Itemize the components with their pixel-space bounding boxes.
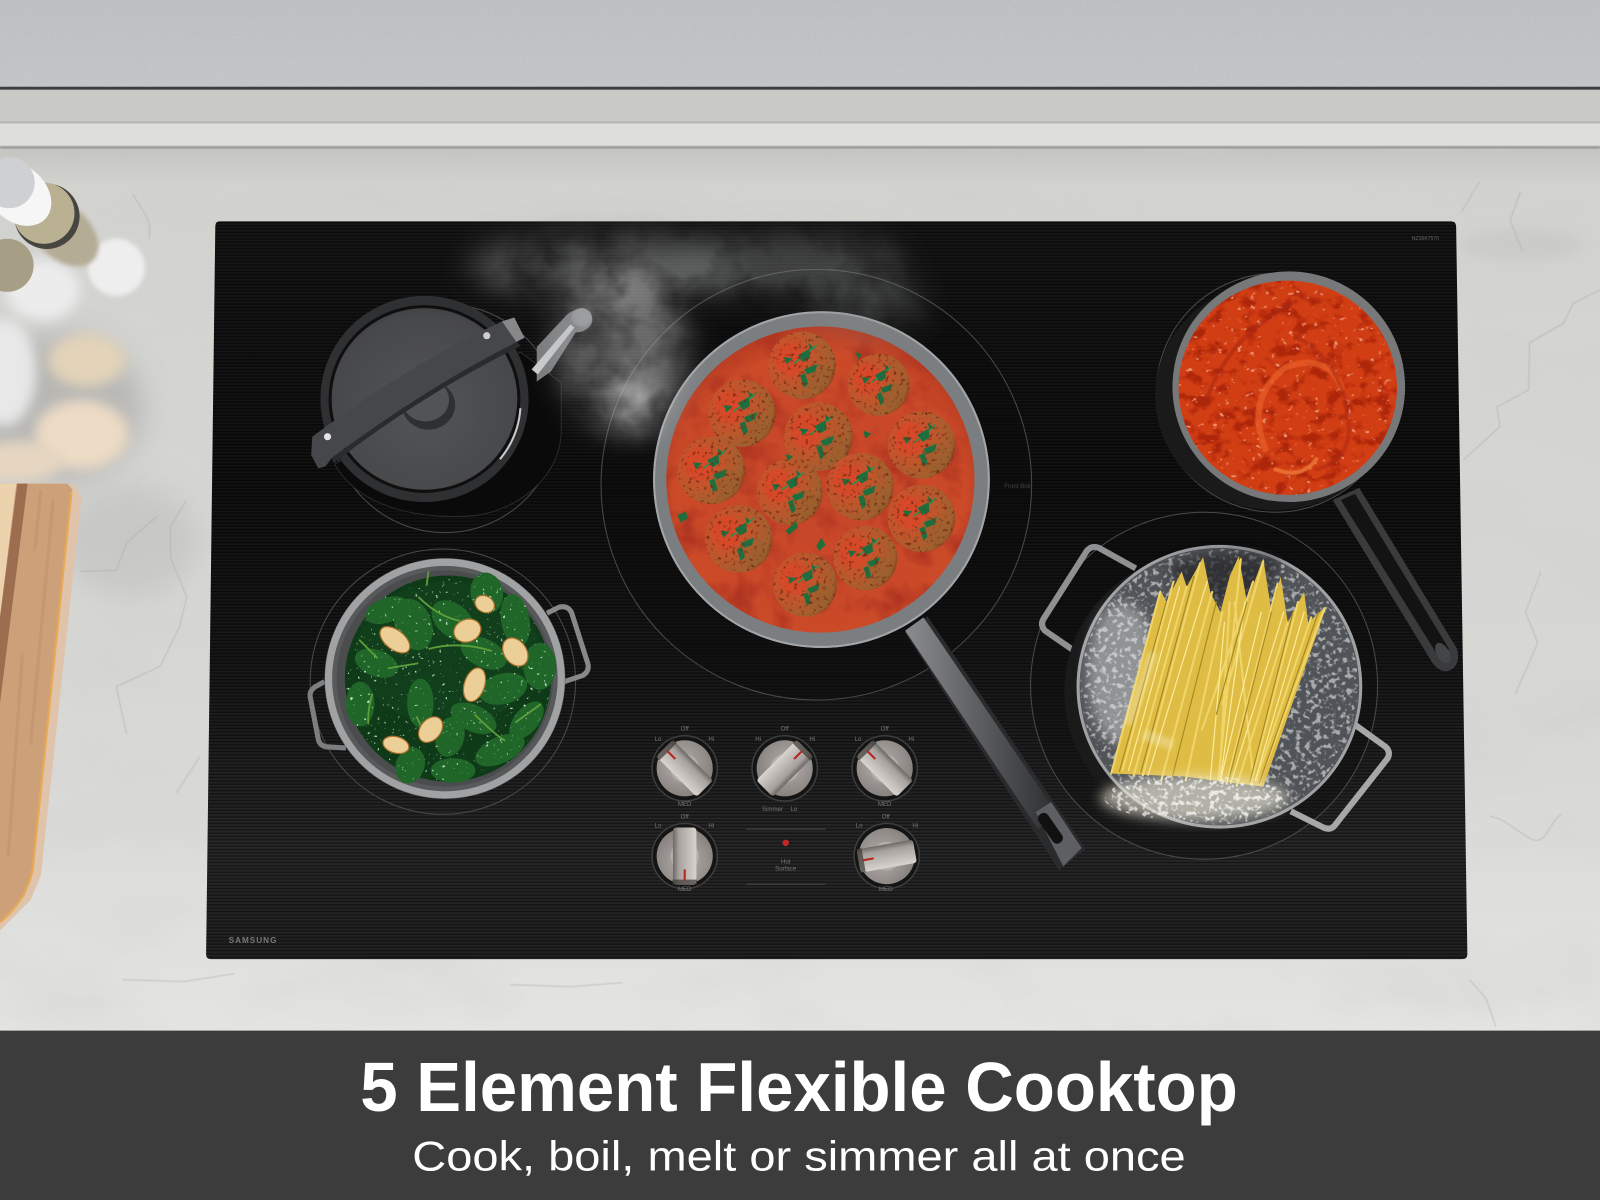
burner rings [310,269,1395,859]
knob labels: MED [678,801,692,808]
hot surface indicator [746,829,826,885]
knob labels: MED [678,886,692,893]
knob labels: MED [879,886,893,893]
knob labels [655,726,918,893]
subtitle: Cook, boil, melt or simmer all at once [412,1132,1186,1179]
pasta pot [1042,545,1389,832]
knob labels: Lo [856,823,863,830]
marble countertop [0,149,1600,1033]
knob labels: Off [882,813,890,820]
knob labels: Hi [908,736,914,743]
knob labels: Lo [855,736,862,743]
spinach pot [310,558,588,799]
saucepan handle [1333,488,1458,671]
title: 5 Element Flexible Cooktop [360,1048,1238,1126]
pan handle [905,616,1086,870]
tomato sauce pan [1155,271,1458,671]
knob labels: Off [681,813,689,820]
loose parsley [678,352,871,551]
knob labels: Hi [755,736,761,743]
left blurred reflections [0,239,145,482]
cutting board [0,484,82,931]
cooktop small labels [229,236,1439,945]
cooktop glass panel [206,221,1467,959]
knob labels: Lo [790,806,798,813]
knob labels: MED [878,801,892,808]
knob labels: Off [881,726,889,733]
bottom foam [1100,776,1288,820]
hot surface indicator: Surface [775,865,797,872]
knob labels: Hi [708,736,714,743]
pot handles [1042,547,1389,829]
knob labels: Hi [708,823,714,830]
spice bottles [0,149,111,292]
caption band [0,1031,1600,1200]
knob labels: Lo [655,736,662,743]
kettle [311,296,592,517]
cooktop small labels: Front Boil [1004,483,1030,490]
backsplash wall [0,0,1600,88]
spinach [345,570,556,787]
garlic [375,592,533,756]
cooktop small labels: NZ36K7570 [1412,236,1439,242]
countertop ledge [0,87,1600,149]
centre frying pan with meatballs [653,311,1086,870]
knob labels: Hi [809,736,815,743]
meatballs [678,332,955,617]
knob labels: Lo [655,823,662,830]
steam [469,233,923,429]
pasta [1111,556,1327,787]
sauce swirls [1204,301,1349,473]
knob labels: Simmer [762,806,783,813]
control knobs [639,722,931,894]
knob labels: Hi [912,823,918,830]
knob labels: Off [781,726,789,733]
hot surface indicator: Hot [781,858,791,865]
knob labels: Off [681,726,689,733]
cooktop small labels: SAMSUNG [229,936,277,945]
